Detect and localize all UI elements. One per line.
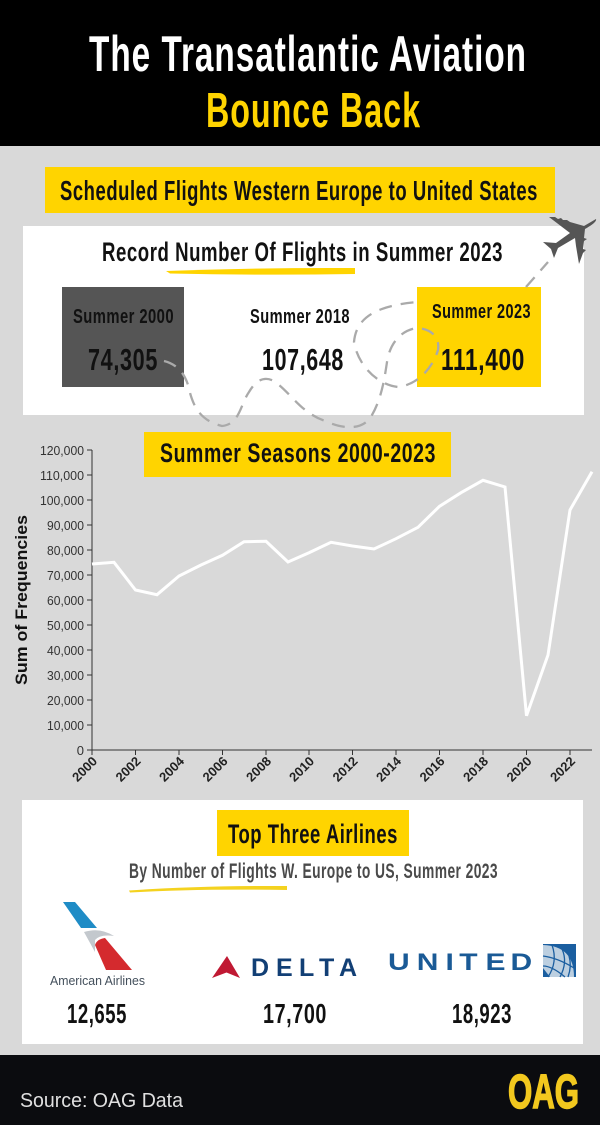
box: summer 2023: Summer 2023 (432, 301, 531, 323)
logo: american airlines: American Airlines (50, 974, 145, 988)
box: summer 2023 (417, 287, 541, 387)
y axis labels: 10,000 (47, 718, 84, 733)
logo: delta: DELTA (251, 954, 357, 982)
x axis labels: 2004 (156, 753, 188, 785)
airline figures: 18,923 (452, 998, 512, 1029)
y axis labels: 30,000 (47, 668, 84, 683)
y axis labels: 70,000 (47, 568, 84, 583)
y axis title: Sum of Frequencies (12, 515, 31, 685)
heading underline (166, 268, 355, 275)
x axis labels: 2000 (69, 754, 100, 785)
title line 2: Bounce Back (206, 84, 421, 138)
x axis labels: 2006 (200, 754, 231, 785)
x axis labels: 2010 (286, 754, 317, 785)
y axis labels: 60,000 (47, 593, 84, 608)
x axis labels: 2008 (243, 754, 274, 785)
y axis labels (40, 443, 84, 758)
box: summer 2023: 111,400 (441, 342, 525, 377)
stat: summer 2018: 107,648 (262, 342, 344, 377)
banner: top three airlines (217, 810, 409, 856)
panel: top three airlines (22, 800, 583, 1044)
y axis labels: 20,000 (47, 693, 84, 708)
y axis labels: 100,000 (40, 493, 84, 508)
y axis labels: 120,000 (40, 443, 84, 458)
box: summer 2000 (62, 287, 184, 387)
y axis labels: 0 (77, 743, 84, 758)
banner: summer seasons: Summer Seasons 2000-2023 (160, 438, 436, 468)
airline figures (67, 998, 512, 1029)
source note: Source: OAG Data (20, 1090, 184, 1112)
x axis labels: 2016 (417, 754, 448, 785)
banner: summer seasons (144, 432, 451, 477)
stat: summer 2018: Summer 2018 (250, 306, 350, 328)
x axis labels: 2022 (547, 754, 578, 785)
y axis labels: 80,000 (47, 543, 84, 558)
x axis labels (69, 753, 578, 785)
data line (92, 472, 592, 716)
logo: united (388, 944, 576, 977)
logo: united: UNITED (388, 948, 532, 975)
footer (0, 1055, 600, 1125)
x axis labels: 2012 (330, 754, 361, 785)
y axis labels: 90,000 (47, 518, 84, 533)
y axis labels: 50,000 (47, 618, 84, 633)
y axis labels: 110,000 (40, 468, 84, 483)
subheading underline (129, 886, 287, 892)
panel: record number of flights (23, 226, 584, 415)
axes (87, 450, 592, 755)
banner: top three airlines: Top Three Airlines (228, 819, 398, 849)
x axis labels: 2018 (460, 754, 491, 785)
x axis labels: 2020 (504, 754, 535, 785)
box: summer 2000: 74,305 (88, 342, 158, 377)
airline figures: 17,700 (263, 998, 327, 1029)
icon: airplane (543, 217, 596, 264)
stat: summer 2018 (250, 306, 350, 377)
dashed flight path (164, 262, 548, 427)
x axis labels: 2002 (113, 754, 144, 785)
x axis labels: 2014 (373, 753, 405, 785)
logo: american airlines (50, 902, 145, 988)
box: summer 2000: Summer 2000 (73, 306, 174, 328)
header band (0, 0, 600, 146)
airline figures: 12,655 (67, 998, 127, 1029)
banner: scheduled flights (45, 167, 555, 213)
line chart: summer seasons (12, 443, 592, 785)
y axis labels: 40,000 (47, 643, 84, 658)
